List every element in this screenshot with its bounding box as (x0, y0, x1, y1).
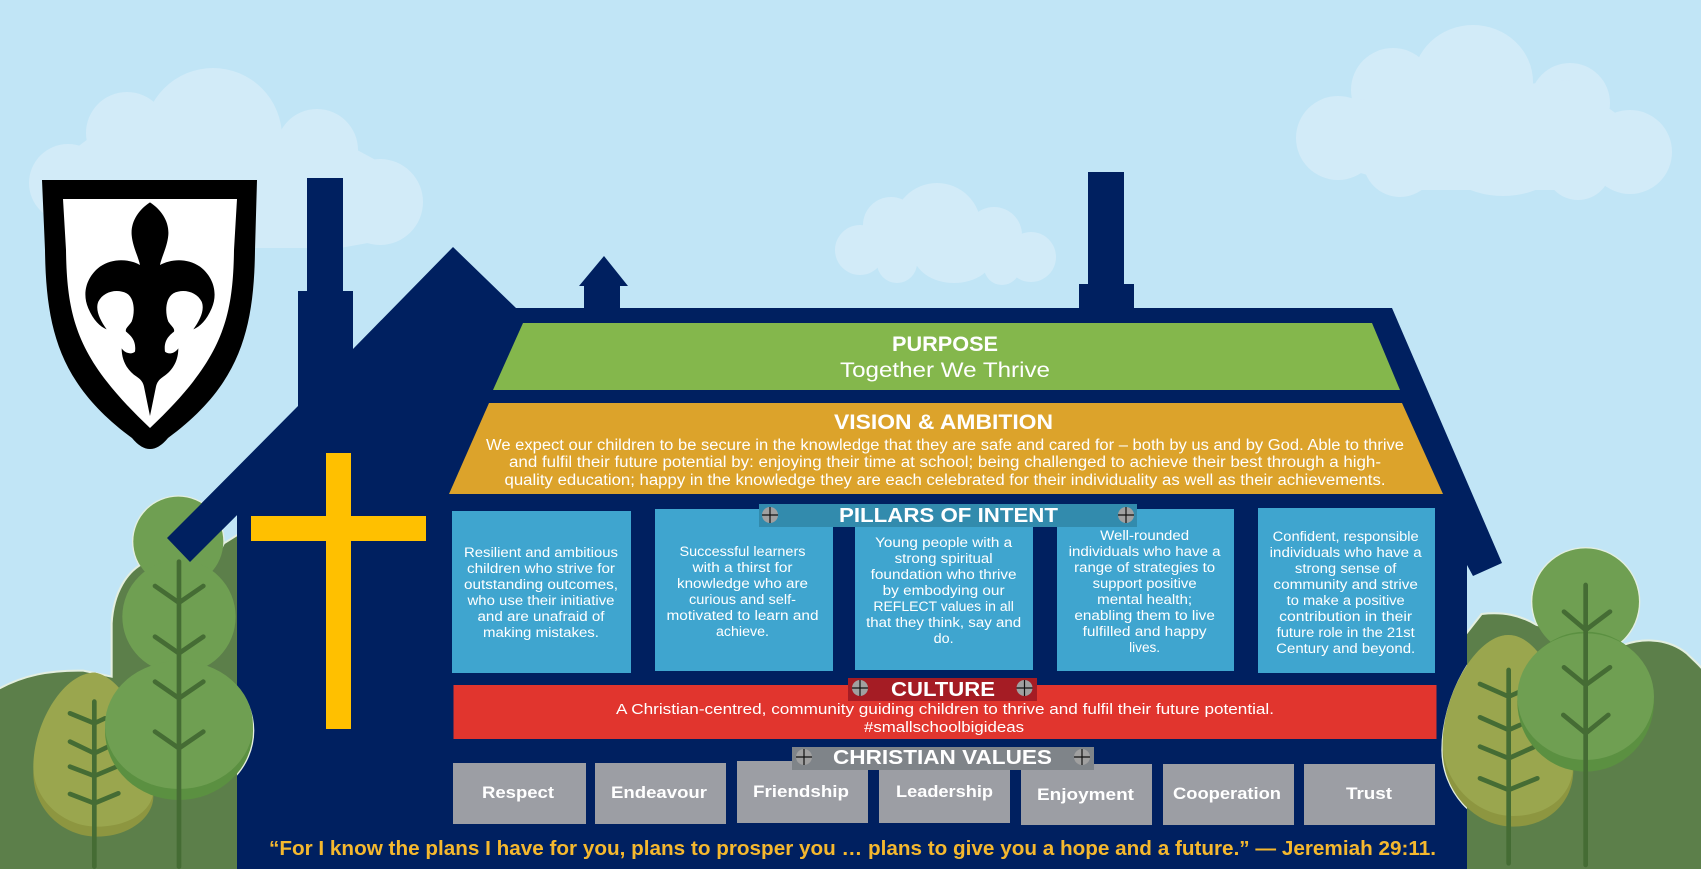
panel: pillar 5 (1258, 508, 1435, 673)
panel: pillar 1: making mistakes. (483, 625, 599, 640)
panel: cooperation (1163, 764, 1294, 825)
panel: pillar 5: individuals who have a (1270, 545, 1422, 560)
panel: pillar 2 (655, 509, 833, 671)
school shield (42, 180, 257, 449)
panel: leadership (879, 761, 1010, 823)
panel: pillar 4: range of strategies to (1074, 560, 1215, 575)
panel: pillar 3: by embodying our (883, 583, 1005, 598)
banner: culture (848, 678, 1037, 701)
tree: right green (1517, 548, 1654, 865)
panel: pillar 4: fulfilled and happy (1083, 624, 1207, 639)
panel: pillar 2: curious and self- (689, 592, 796, 607)
cloud: left (29, 68, 423, 248)
heading: purpose: PURPOSE (892, 333, 998, 356)
bushes: left background (0, 533, 240, 869)
tree halo: right top (1532, 548, 1639, 655)
panel: pillar 2: knowledge who are (677, 576, 808, 591)
roof eave front (167, 468, 237, 562)
banner: pillars of intent: PILLARS OF INTENT (839, 505, 1058, 527)
panel: pillar 2: with a thirst for (691, 560, 793, 575)
panel: pillar 5: to make a positive (1287, 593, 1405, 608)
panel: pillar 5: contribution in their (1279, 609, 1413, 624)
panel: pillar 3: Young people with a (875, 535, 1013, 550)
panel: pillar 5: Confident, responsible (1273, 529, 1419, 544)
panel: culture (454, 685, 1436, 739)
panel: pillar 4: lives. (1129, 640, 1160, 655)
panel: pillar 4: individuals who have a (1069, 544, 1221, 559)
banner: christian values (792, 747, 1094, 770)
panel: endeavour: Endeavour (611, 783, 707, 802)
tree: left olive (33, 673, 153, 867)
panel: pillar 1 (452, 511, 631, 673)
cloud: centre (835, 183, 1056, 285)
text: vision statement: We expect our children to be secure in the knowledge that they are safe and cared for – both by us and by God. Able to thrive (486, 437, 1404, 454)
panel: pillar 3: do. (934, 631, 954, 646)
panel: pillar 4: enabling them to live (1074, 608, 1215, 623)
text: culture statement: A Christian-centred, community guiding children to thrive and fulfil their future potential. (616, 701, 1274, 718)
house silhouette (167, 172, 1502, 869)
panel: pillar 1: and are unafraid of (478, 609, 605, 624)
tree: left green (105, 497, 253, 867)
heading: vision and ambition: VISION & AMBITION (834, 411, 1053, 434)
panel: pillar 3: strong spiritual (895, 551, 993, 566)
banner: christian values: CHRISTIAN VALUES (833, 747, 1052, 769)
panel: enjoyment (1021, 764, 1152, 825)
tree: right olive (1443, 635, 1573, 863)
panel: endeavour (595, 763, 726, 824)
banner: pillars of intent (759, 504, 1137, 527)
panel: pillar 3 (855, 509, 1033, 670)
panel: leadership: Leadership (896, 782, 993, 801)
panel: pillar 3: REFLECT values in all (873, 599, 1014, 614)
panel: friendship (737, 761, 868, 823)
panel: pillar 2: motivated to learn and (666, 608, 818, 623)
panel: trust: Trust (1346, 784, 1392, 803)
panel: respect (453, 763, 586, 824)
text: vision statement: quality education; happy in the knowledge they are each celebrated for their individuality as well as their achievements. (504, 472, 1386, 489)
text: together we thrive: Together We Thrive (840, 359, 1050, 382)
panel: pillar 5: future role in the 21st (1277, 625, 1415, 640)
panel: pillar 5: Century and beyond. (1276, 641, 1415, 656)
bushes: right background (1463, 613, 1701, 869)
panel: pillar 5: community and strive (1273, 577, 1418, 592)
text: hashtag: #smallschoolbigideas (864, 719, 1024, 736)
quote: Jeremiah 29:11: “For I know the plans I have for you, plans to prosper you … plans to give you a hope and a future.” — Jeremiah 29:11. (269, 837, 1436, 860)
tree halo: left top (133, 497, 223, 587)
text: vision statement: and fulfil their future potential by: enjoying their time at school; being challenged to achieve their best through a high- (509, 454, 1381, 471)
panel: pillar 1: children who strive for (467, 561, 616, 576)
icon: fleur-de-lis (85, 202, 215, 416)
text: vision statement (486, 437, 1404, 489)
panel: pillar 4 (1057, 509, 1234, 671)
banner: culture: CULTURE (891, 679, 995, 701)
panel: pillar 4: Well-rounded (1100, 528, 1189, 543)
panel: pillar 3: that they think, say and (866, 615, 1021, 630)
panel: pillar 1: outstanding outcomes, (464, 577, 618, 592)
panel: pillar 2: achieve. (716, 624, 769, 639)
panel: trust (1304, 764, 1435, 825)
panel: purpose (493, 323, 1400, 390)
panel: respect: Respect (482, 783, 554, 802)
cloud: right (1296, 25, 1672, 200)
panel: pillar 1: who use their initiative (466, 593, 614, 608)
panel: pillar 1: Resilient and ambitious (464, 545, 618, 560)
panel: pillar 4: support positive (1093, 576, 1197, 591)
panel: pillar 2: Successful learners (680, 544, 806, 559)
panel: pillar 3: foundation who thrive (871, 567, 1017, 582)
panel: cooperation: Cooperation (1173, 784, 1281, 803)
icon: yellow cross (251, 453, 426, 729)
panel: vision and ambition (449, 403, 1443, 494)
panel: pillar 5: strong sense of (1295, 561, 1397, 576)
panel: enjoyment: Enjoyment (1037, 785, 1134, 804)
panel: friendship: Friendship (753, 782, 849, 801)
panel: pillar 4: mental health; (1097, 592, 1192, 607)
